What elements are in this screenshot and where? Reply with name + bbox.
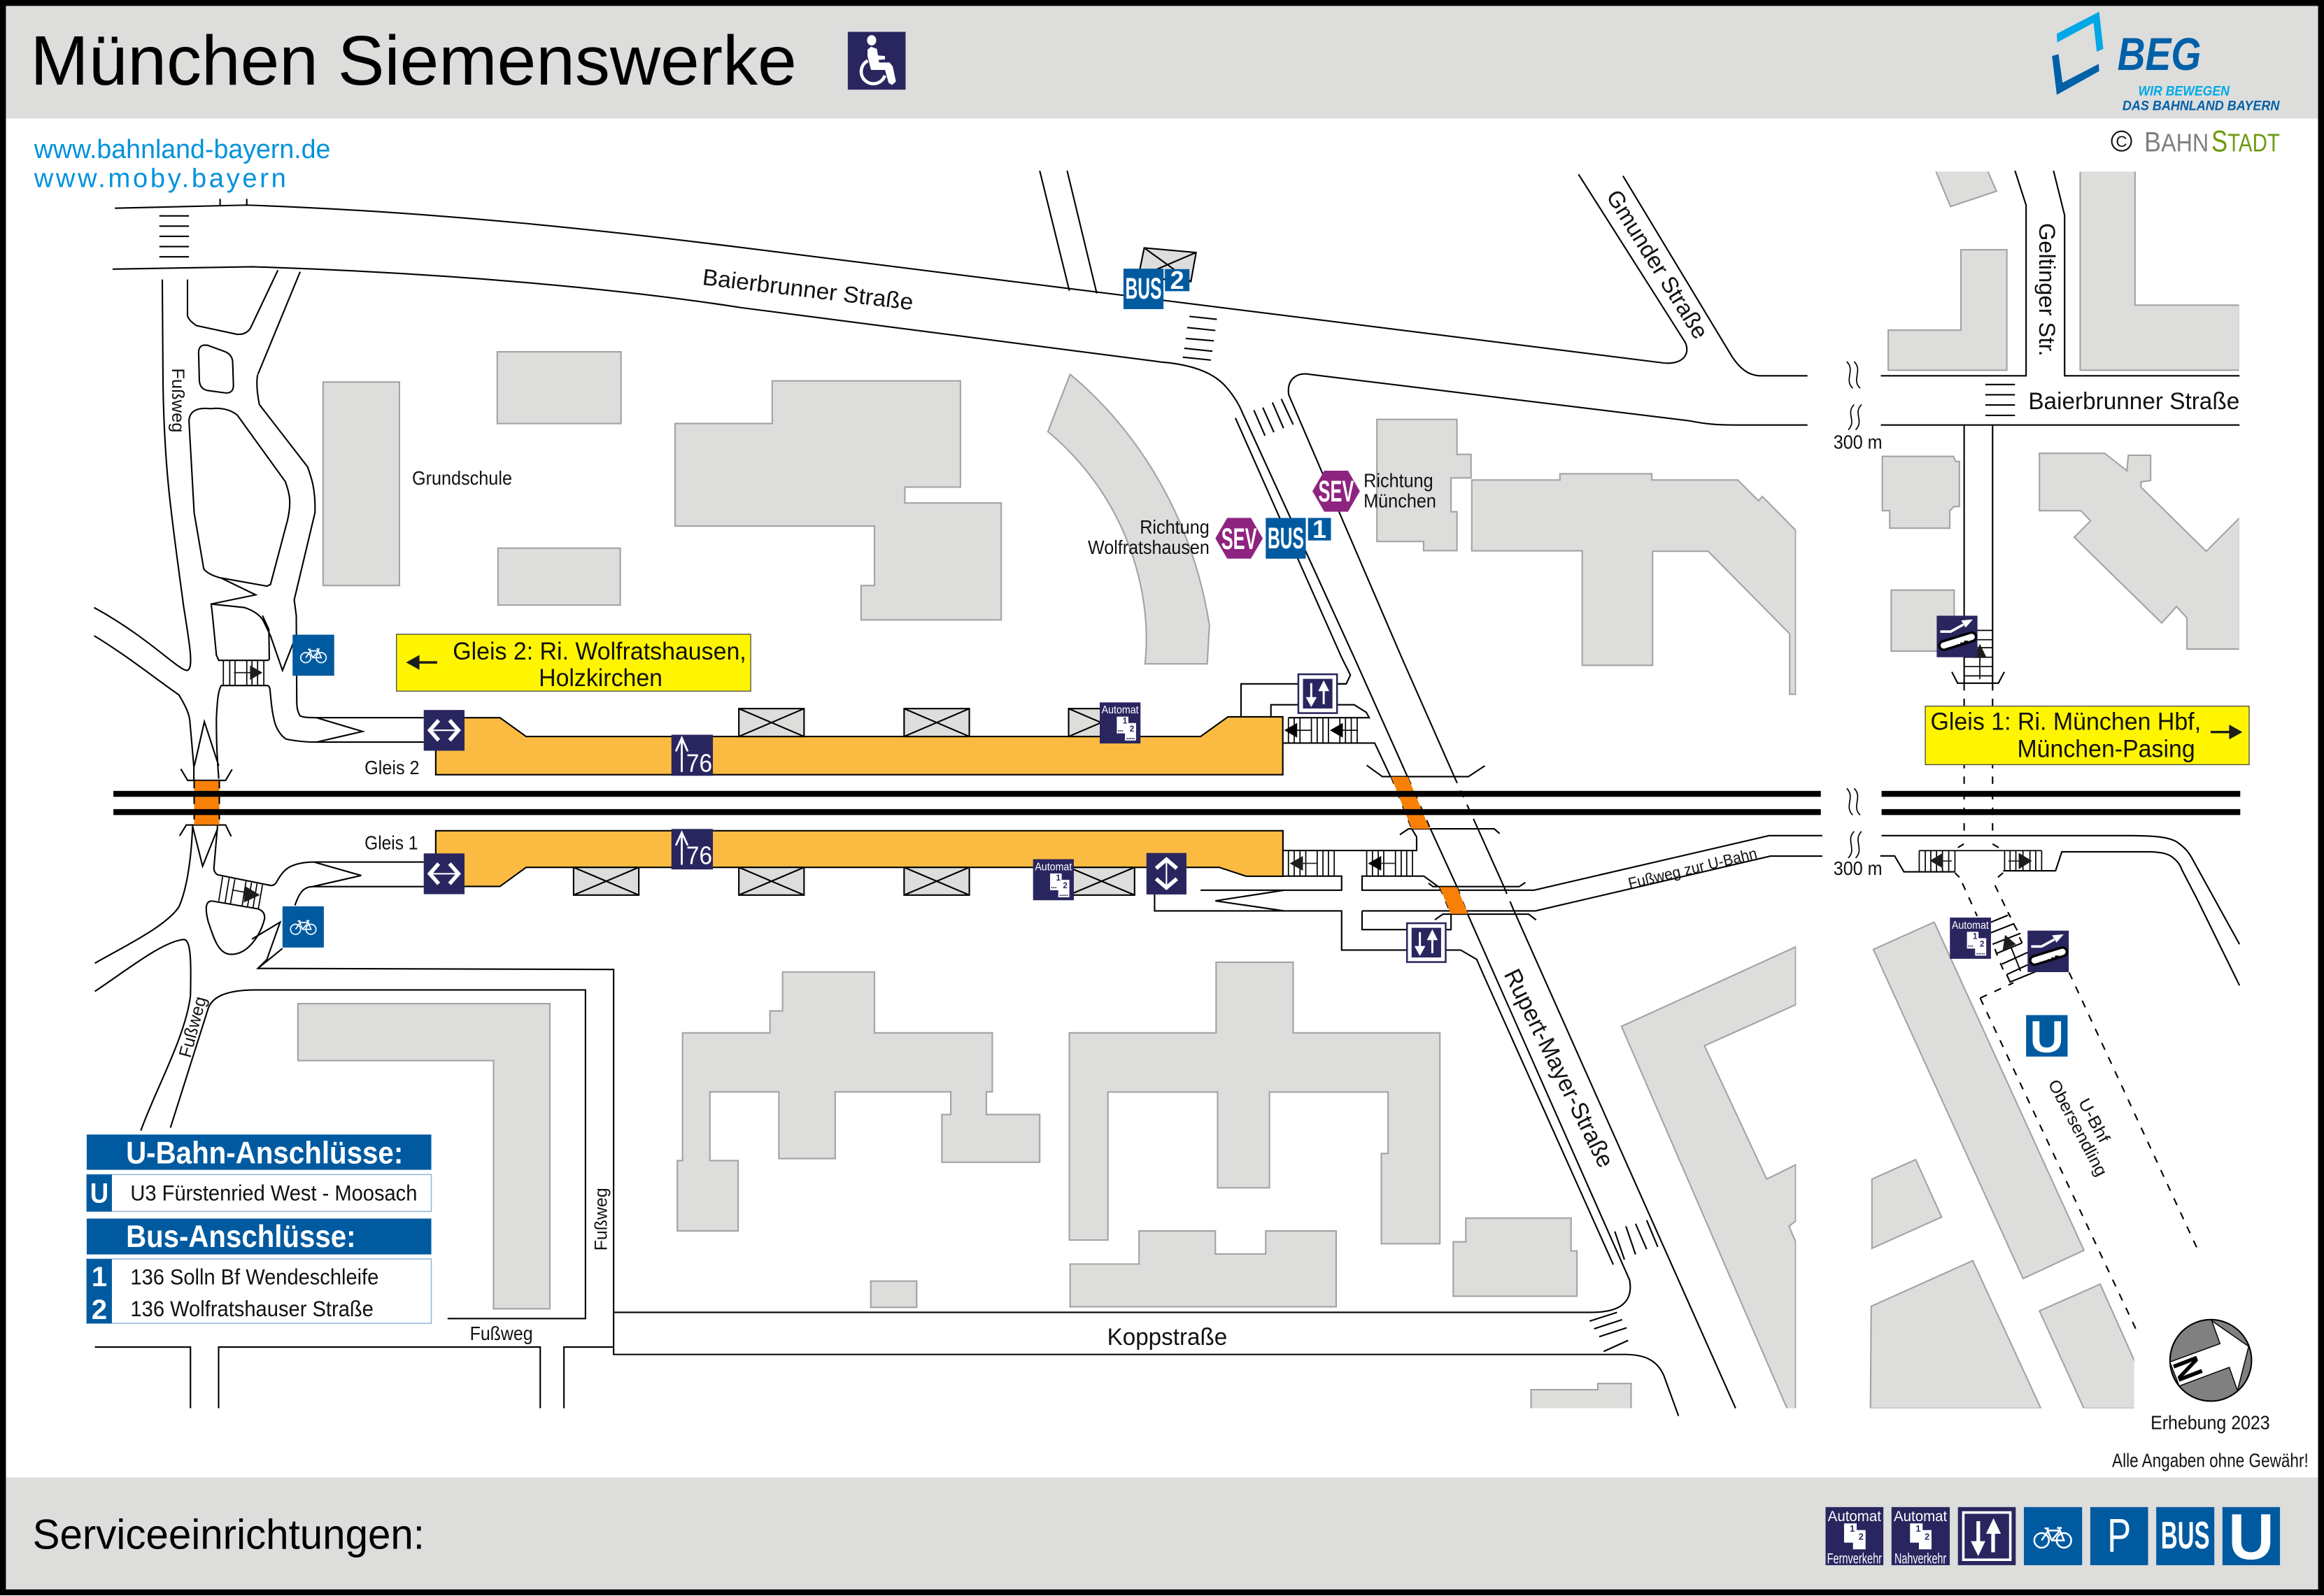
- callout: Gleis 1 direction: Gleis 1: Ri. München Hbf,: [1931, 708, 2201, 735]
- stairs: east Gleis 2: [1284, 718, 1358, 743]
- service icon: long distance ticket machine: [1826, 1507, 1883, 1567]
- street and place labels: Wolfratshausen: [1088, 536, 1210, 558]
- railway tracks: [113, 791, 2240, 815]
- service icon: local ticket machine: Automat: [1894, 1509, 1947, 1525]
- road: Rupert-Mayer-Strasse: [252, 829, 1630, 1312]
- header band: [6, 6, 2318, 119]
- stairs: south platform access: [1919, 850, 2041, 871]
- legend: U-Bahn connections: [87, 1134, 432, 1211]
- street and place labels: Grundschule: [412, 467, 512, 489]
- platforms: [436, 717, 1283, 886]
- path: bridge flares west: [180, 769, 232, 836]
- sign: U-Bahn station: U: [2029, 1012, 2064, 1062]
- break marks: 300 m gaps: [1847, 362, 1862, 858]
- service icon: bus: BUS: [2161, 1513, 2210, 1557]
- street and place labels: Fußweg: [168, 368, 187, 432]
- sign: ticket machine Gleis 2: [1100, 702, 1140, 743]
- service icon: lift: [1958, 1507, 2015, 1565]
- path: station access east: [1241, 684, 1369, 718]
- legend: U-Bahn connections: U-Bahn-Anschlüsse:: [126, 1136, 403, 1170]
- sign: bicycle parking north: [292, 635, 334, 676]
- platform: Gleis 2: [436, 717, 1283, 775]
- service icon: long distance ticket machine: Fernverkehr: [1827, 1551, 1882, 1567]
- street and place labels: Baierbrunner Straße: [701, 264, 915, 315]
- stairs: Baierbrunner access: [1964, 630, 1992, 679]
- logo: BEG: [2052, 12, 2281, 114]
- street and place labels: Rupert-Mayer-Straße: [1498, 964, 1619, 1172]
- path: right panel roads: [1881, 171, 2239, 425]
- street and place labels: 300 m: [1834, 431, 1883, 453]
- sign: lift north: [1298, 674, 1338, 714]
- buildings: [298, 154, 2269, 1426]
- title: München Siemenswerke: [30, 22, 797, 100]
- sign: platform access Gleis 1: [424, 853, 465, 895]
- callout: Gleis 1 direction: München-Pasing: [2017, 736, 2195, 763]
- sign: ticket machine U-Bahn: 2: [1980, 940, 1985, 949]
- legend: bus connections: 136 Wolfratshauser Straße: [130, 1296, 374, 1321]
- sign: platform height 76 Gleis 2: 76: [686, 748, 712, 777]
- survey year: Erhebung 2023: [2151, 1412, 2270, 1434]
- copyright: BahnStadt: C: [2116, 133, 2127, 150]
- street and place labels: Fußweg: [592, 1188, 611, 1251]
- service icon: local ticket machine: [1892, 1507, 1950, 1567]
- callout: Gleis 1 direction: [1925, 706, 2249, 764]
- path: upper left footpaths: [94, 280, 190, 671]
- service icon: parking: P: [2107, 1509, 2131, 1562]
- compass: north arrow: N: [2165, 1351, 2211, 1386]
- service icon: bicycle: [2024, 1507, 2082, 1565]
- legend: bus connections: Bus-Anschlüsse:: [126, 1220, 355, 1254]
- copyright: BahnStadt: STADT: [2211, 125, 2280, 158]
- street and place labels: Gmunder Straße: [1601, 185, 1714, 343]
- street and place labels: Fußweg zur U-Bahn: [1627, 844, 1759, 892]
- street and place labels: Gleis 2: [364, 757, 420, 778]
- street and place labels: Obersendling: [2044, 1076, 2111, 1180]
- sign: ticket machine U-Bahn: 1: [1973, 932, 1978, 941]
- street and place labels: München: [1363, 490, 1436, 512]
- sign: ticket machine Gleis 2: Automat: [1102, 704, 1139, 716]
- sign: replacement bus towards Wolfratshausen: [1215, 518, 1263, 559]
- website links: www.moby.bayern: [34, 164, 286, 194]
- icon: wheelchair accessible: [848, 32, 905, 90]
- legend: bus connections: 1: [92, 1261, 107, 1292]
- sign: platform height 76 Gleis 1: [672, 829, 713, 869]
- sign: platform height 76 Gleis 2: [672, 735, 713, 777]
- logo: BEG: BEG: [2118, 29, 2201, 80]
- sign: bus stop 2: 2: [1170, 266, 1184, 294]
- street and place labels: Fußweg: [470, 1323, 533, 1344]
- sign: ticket machine Gleis 1: 2: [1063, 881, 1068, 890]
- zebra crossings: [160, 216, 2015, 1351]
- sign: ticket machine Gleis 2: 1: [1123, 717, 1128, 726]
- street and place labels: Richtung: [1363, 469, 1433, 491]
- street and place labels: Geltinger Str.: [2034, 223, 2060, 357]
- sign: escalator south: [2027, 931, 2069, 972]
- logo: BEG: DAS BAHNLAND BAYERN: [2123, 99, 2281, 114]
- footer heading: Serviceeinrichtungen:: [33, 1511, 425, 1558]
- legend: U-Bahn connections: U: [90, 1177, 108, 1209]
- stairs arrow: U-Bahn entrance: [2003, 935, 2020, 971]
- sign: ticket machine Gleis 1: Automat: [1035, 860, 1072, 873]
- service icon: U-Bahn: U: [2228, 1500, 2274, 1573]
- street and place labels: Gleis 1: [364, 832, 418, 854]
- sign: bus stop 1: BUS: [1268, 522, 1304, 555]
- callout: Gleis 2 direction: [397, 634, 751, 692]
- sign: replacement bus towards München: [1312, 471, 1360, 512]
- pedestrian bridges: [194, 777, 1468, 914]
- callout: Gleis 2 direction: Holzkirchen: [539, 664, 663, 692]
- path: lower left footpaths: [95, 825, 192, 963]
- legend: bus connections: 2: [92, 1294, 107, 1325]
- platform shelters: [574, 248, 1196, 895]
- sign: escalator north: [1936, 615, 1978, 657]
- road: Koppstrasse: [614, 1312, 1678, 1416]
- callout: Gleis 2 direction: Gleis 2: Ri. Wolfratshausen,: [453, 638, 746, 665]
- sign: bus stop 2: BUS: [1126, 272, 1161, 305]
- street and place labels: U-Bhf: [2074, 1095, 2113, 1146]
- roads and footpaths: [94, 171, 2239, 1416]
- stairs: north west: [223, 660, 264, 685]
- sign: lift south: [1406, 922, 1447, 963]
- legend: bus connections: [87, 1218, 432, 1325]
- sign: platform access Gleis 2: [424, 710, 465, 750]
- copyright: BahnStadt: [2112, 125, 2280, 158]
- stairs: [219, 630, 2041, 971]
- street and place labels: Koppstraße: [1107, 1324, 1227, 1351]
- legend: U-Bahn connections: U3 Fürstenried West - Moosach: [130, 1180, 417, 1205]
- compass: north arrow: [2165, 1320, 2251, 1401]
- street and place labels: Baierbrunner Straße: [2028, 388, 2239, 415]
- legend: bus connections: 136 Solln Bf Wendeschleife: [130, 1264, 378, 1290]
- website links: www.bahnland-bayern.de: [34, 134, 330, 164]
- logo: BEG: WIR BEWEGEN: [2139, 85, 2230, 99]
- service icon: long distance ticket machine: Automat: [1828, 1509, 1881, 1525]
- service icon: local ticket machine: Nahverkehr: [1894, 1551, 1946, 1567]
- road: Baierbrunner Strasse and Gmunder Strasse: [115, 174, 1687, 363]
- service icon: parking: [2090, 1507, 2148, 1565]
- sign: ticket machine Gleis 1: [1033, 860, 1074, 900]
- website links: [34, 134, 330, 194]
- street and place labels: 300 m: [1834, 857, 1883, 879]
- service icon: long distance ticket machine: 2: [1859, 1531, 1864, 1541]
- service icon: long distance ticket machine: 1: [1850, 1523, 1855, 1534]
- stairs: east Gleis 1: [1289, 850, 1412, 876]
- sign: ticket machine U-Bahn: [1950, 918, 1991, 959]
- service icon: local ticket machine: 2: [1925, 1531, 1929, 1541]
- street and place labels: [168, 185, 2239, 1351]
- sign: platform height 76 Gleis 1: 76: [686, 841, 712, 869]
- sign: ticket machine Gleis 1: 1: [1056, 874, 1061, 883]
- footer band: [6, 1477, 2318, 1588]
- street and place labels: Richtung: [1140, 516, 1210, 538]
- street and place labels: Fußweg: [176, 995, 211, 1060]
- sign: replacement bus towards Wolfratshausen: SEV: [1221, 522, 1257, 555]
- sign: ticket machine U-Bahn: Automat: [1952, 919, 1989, 932]
- sign: ticket machine Gleis 2: 2: [1130, 725, 1135, 734]
- service icon: local ticket machine: 1: [1915, 1523, 1920, 1534]
- sign: replacement bus towards München: SEV: [1319, 475, 1354, 508]
- copyright: BahnStadt: BAHN: [2144, 127, 2209, 158]
- sign: up-down path: [1147, 853, 1186, 895]
- service icon: bus: [2156, 1507, 2214, 1565]
- sign: bicycle parking south: [283, 906, 324, 948]
- sign: bus stop 1: 1: [1312, 515, 1326, 543]
- stairs: south west: [219, 877, 262, 909]
- platform: Gleis 1: [436, 831, 1283, 886]
